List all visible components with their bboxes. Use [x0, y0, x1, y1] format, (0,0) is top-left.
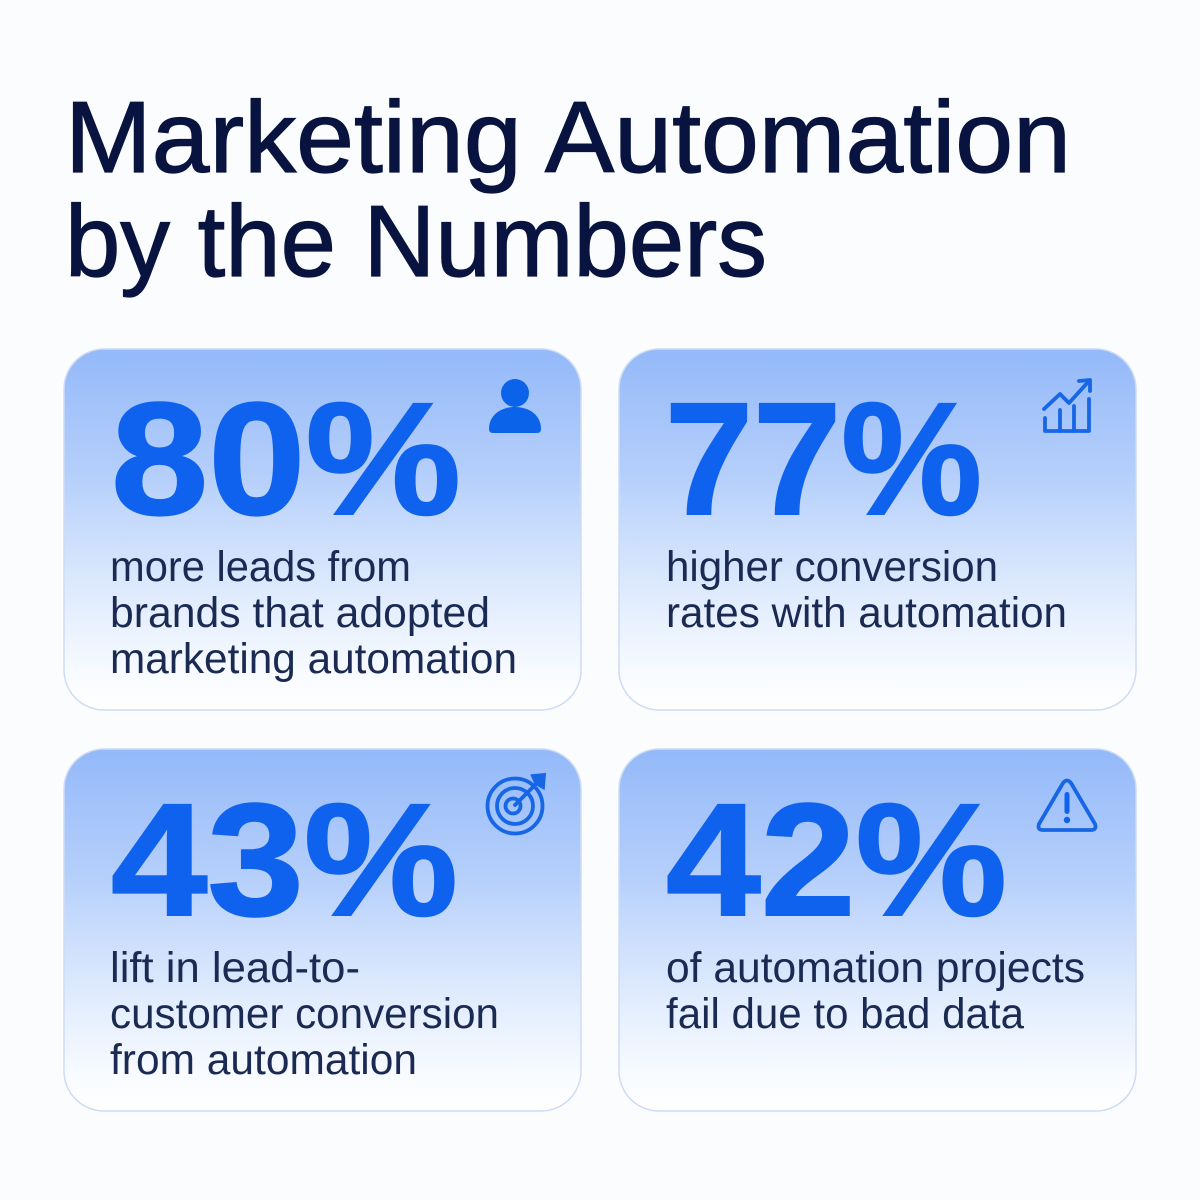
title: Marketing Automation — [65, 82, 1071, 194]
stat: 77%: 77% — [665, 369, 982, 548]
icon: warning triangle — [1038, 780, 1096, 830]
panel: 42% fail — [619, 749, 1136, 1111]
stat: 80%: 80% — [111, 369, 461, 548]
icon: target with arrow — [488, 775, 544, 834]
description: bad data: fail due to bad data — [666, 991, 1024, 1038]
icon: growth chart — [1044, 380, 1090, 431]
description: lift in conversion: lift in lead-to- — [110, 945, 360, 992]
description: lift in conversion — [110, 945, 499, 1084]
description: bad data: of automation projects — [666, 945, 1085, 992]
stat: 42%: 42% — [666, 770, 1007, 949]
description: lift in conversion: customer conversion — [110, 991, 499, 1038]
description: more leads: brands that adopted — [110, 590, 490, 637]
description: lift in conversion: from automation — [110, 1037, 417, 1084]
description: bad data — [666, 945, 1085, 1038]
description: higher conversion: rates with automation — [666, 590, 1067, 637]
description: more leads: marketing automation — [110, 636, 517, 683]
panel: 80% more leads — [64, 349, 581, 710]
panel: 43% lift — [64, 749, 581, 1111]
title: by the Numbers — [65, 186, 767, 298]
description: higher conversion: higher conversion — [666, 544, 998, 591]
description: more leads: more leads from — [110, 544, 411, 591]
description: higher conversion — [666, 544, 1067, 637]
title — [65, 82, 1071, 298]
description: more leads — [110, 544, 517, 683]
icon: person — [489, 379, 541, 433]
stat: 43%: 43% — [111, 770, 458, 949]
panel: 77% higher conversion — [619, 349, 1136, 710]
